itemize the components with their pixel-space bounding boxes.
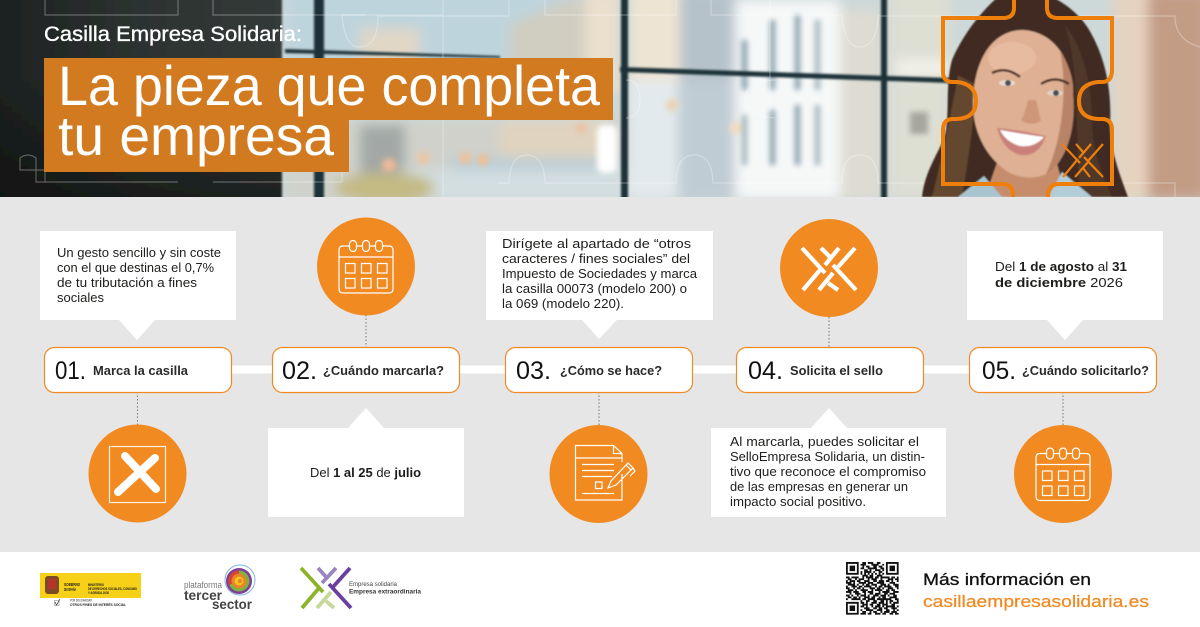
- logo: government of Spain: OTROS FINES DE INTERÉS SOCIAL: [70, 602, 127, 607]
- step 4 callout: [711, 408, 946, 517]
- icon: checkbox with X: [88, 424, 186, 522]
- step 2 label: 02.: [282, 357, 317, 385]
- timeline bar: [44, 366, 1157, 374]
- icon: calendar step 2: [317, 218, 415, 316]
- logo: government of Spain: GOBIERNO: [64, 582, 80, 587]
- step 1 label: 01.: [55, 357, 86, 385]
- small logo mark: [1062, 144, 1103, 177]
- logo: government of Spain: DE DERECHOS SOCIALES, CONSUMO: [88, 586, 137, 591]
- logo: government of Spain: DE ESPAÑA: [64, 586, 76, 592]
- step 3 label: 03.: [516, 357, 551, 385]
- logo: Empresa solidaria: [301, 568, 421, 608]
- step 1 callout: [40, 231, 236, 340]
- step 4 label: Solicita el sello: [790, 363, 883, 378]
- step 4 label: [736, 348, 924, 392]
- more information text: casillaempresasolidaria.es: [923, 592, 1149, 611]
- step 1 callout: sociales: [57, 290, 104, 305]
- step 3 callout: Dirígete al apartado de “otros: [502, 236, 692, 251]
- step 4 label: 04.: [748, 357, 783, 385]
- step 3 callout: [486, 231, 713, 339]
- connectors: [138, 315, 1063, 425]
- logo: plataforma tercer sector: sector: [212, 596, 253, 612]
- step 2 label: [272, 348, 460, 392]
- step 3 callout: Impuesto de Sociedades y marca: [502, 266, 698, 281]
- logo: government of Spain: MINISTERIO: [88, 582, 104, 587]
- logo: plataforma tercer sector: plataforma: [184, 580, 222, 590]
- step 5 label: ¿Cuándo solicitarlo?: [1022, 363, 1149, 378]
- step 3 label: ¿Cómo se hace?: [560, 363, 662, 378]
- step 1 label: Marca la casilla: [93, 363, 189, 378]
- faint puzzle lines: [20, 0, 1200, 197]
- grey content panel: [0, 197, 1200, 552]
- woman portrait: [922, 0, 1128, 200]
- step 3 callout: la 069 (modelo 220).: [502, 296, 624, 311]
- step 2 callout: Del 1 al 25 de julio: [310, 465, 421, 480]
- icon: document and pen: [550, 425, 648, 523]
- hero photo background: [0, 0, 1200, 207]
- step 4 callout: tivo que reconoce el compromiso: [730, 464, 926, 479]
- logo: government of Spain: [40, 573, 141, 607]
- step 3 callout: caracteres / fines sociales” del: [502, 251, 690, 266]
- step 1 callout: Un gesto sencillo y sin coste: [57, 245, 221, 260]
- step 4 callout: SelloEmpresa Solidaria, un distin-: [730, 449, 925, 464]
- logo: government of Spain: Y AGENDA 2030: [88, 590, 110, 595]
- step 1 label: [44, 348, 232, 392]
- footer band: [0, 552, 1200, 627]
- puzzle frame: [943, 0, 1112, 200]
- step 5 label: [970, 348, 1156, 392]
- logo: Empresa solidaria: Empresa solidaria: [349, 581, 397, 588]
- logo: Empresa solidaria: Empresa extraordinaria: [349, 588, 421, 596]
- step 5 callout: Del 1 de agosto al 31: [995, 259, 1127, 274]
- step 5 label: 05.: [982, 357, 1016, 385]
- step 5 callout: [967, 231, 1163, 340]
- QR code: [846, 563, 899, 614]
- step 1 callout: de tu tributación a fines: [57, 275, 198, 290]
- title block: La pieza que completa: [58, 54, 601, 117]
- more information text: [923, 570, 1149, 611]
- subtitle: Casilla Empresa Solidaria:: [44, 23, 302, 46]
- logo: plataforma tercer sector: [184, 565, 255, 612]
- step 4 callout: de las empresas en generar un: [730, 479, 908, 494]
- step 3 label: [506, 348, 692, 392]
- step 2 callout: [268, 408, 464, 517]
- step 4 callout: Al marcarla, puedes solicitar el: [730, 434, 919, 449]
- logo: plataforma tercer sector: tercer: [184, 587, 223, 603]
- title block: tu empresa: [58, 104, 335, 167]
- step 2 label: ¿Cuándo marcarla?: [323, 363, 444, 378]
- step 1 callout: con el que destinas el 0,7%: [57, 260, 214, 275]
- more information text: Más información en: [923, 570, 1091, 589]
- logo: government of Spain: POR SOLIDARIDAD: [70, 598, 92, 602]
- step 4 logo icon: [780, 219, 878, 317]
- step 5 callout: de diciembre 2026: [995, 275, 1123, 290]
- step 4 callout: impacto social positivo.: [730, 494, 866, 509]
- icon: calendar step 5: [1014, 425, 1112, 523]
- title block: [44, 54, 613, 172]
- step 3 callout: la casilla 00073 (modelo 200) o: [502, 281, 687, 296]
